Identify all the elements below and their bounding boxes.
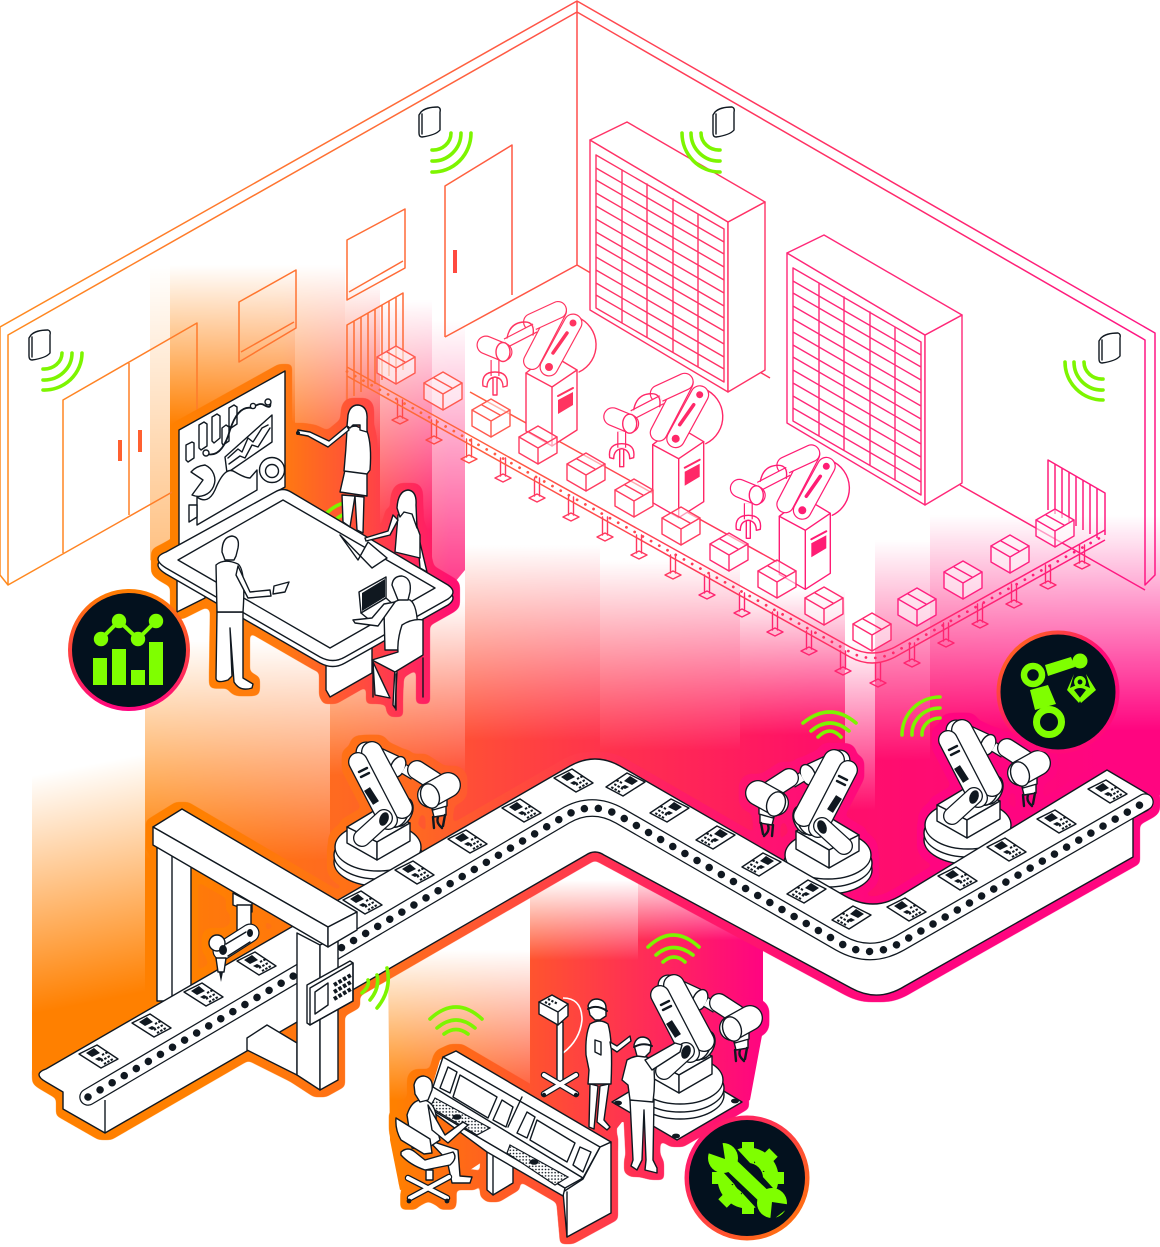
halos around foreground groups [32,364,1160,1244]
gantry foot and right post [247,933,338,1090]
icon badge: maintenance tools [684,1116,810,1240]
dashboard board [179,371,285,545]
person: presenter [296,405,371,533]
person: seated man at laptop [353,576,423,710]
upper conveyor legs [392,400,1090,687]
storage shelf 1 [590,122,765,392]
robot arm 3 [924,730,1038,864]
control panel on gantry [307,961,353,1025]
gantry left post [157,846,191,1001]
upper robots [483,310,849,589]
conveyor belt body [39,759,1152,1133]
factory room walls [0,1,1155,590]
gantry tool head [209,893,253,982]
person: seated woman with laptop [340,490,427,572]
icon badge: analytics [68,589,190,711]
robot arm 2 [758,760,872,894]
production line group [39,730,1152,1133]
robot plate and arm [612,985,750,1140]
gantry beam [153,809,357,947]
person: engineer in lab coat [586,999,631,1130]
wall sensors with wifi waves [29,107,1120,400]
robot arm 1 [334,752,448,886]
table legs [177,575,372,697]
meeting table with team and dashboard [158,371,453,710]
upper conveyor boxes [377,346,1074,651]
person: standing man with tablet [216,536,289,689]
person: worker touching robot [622,1037,682,1173]
wifi waves behind table [322,503,345,524]
person: seated operator [396,1076,472,1203]
table top [158,490,453,666]
storage shelf 2 [787,235,962,505]
control room group [396,985,750,1237]
background: layered gradient columns [32,270,1160,1190]
circuit boards on conveyor [79,769,1127,1068]
wifi waves in control room [430,935,699,1034]
upper conveyor belt [347,367,1105,663]
upper conveyor back edge [470,392,777,562]
instrument stand [539,995,582,1097]
icon badge: robot arm [996,630,1120,754]
operator console [422,1051,611,1237]
wifi waves on production line [362,697,940,1008]
